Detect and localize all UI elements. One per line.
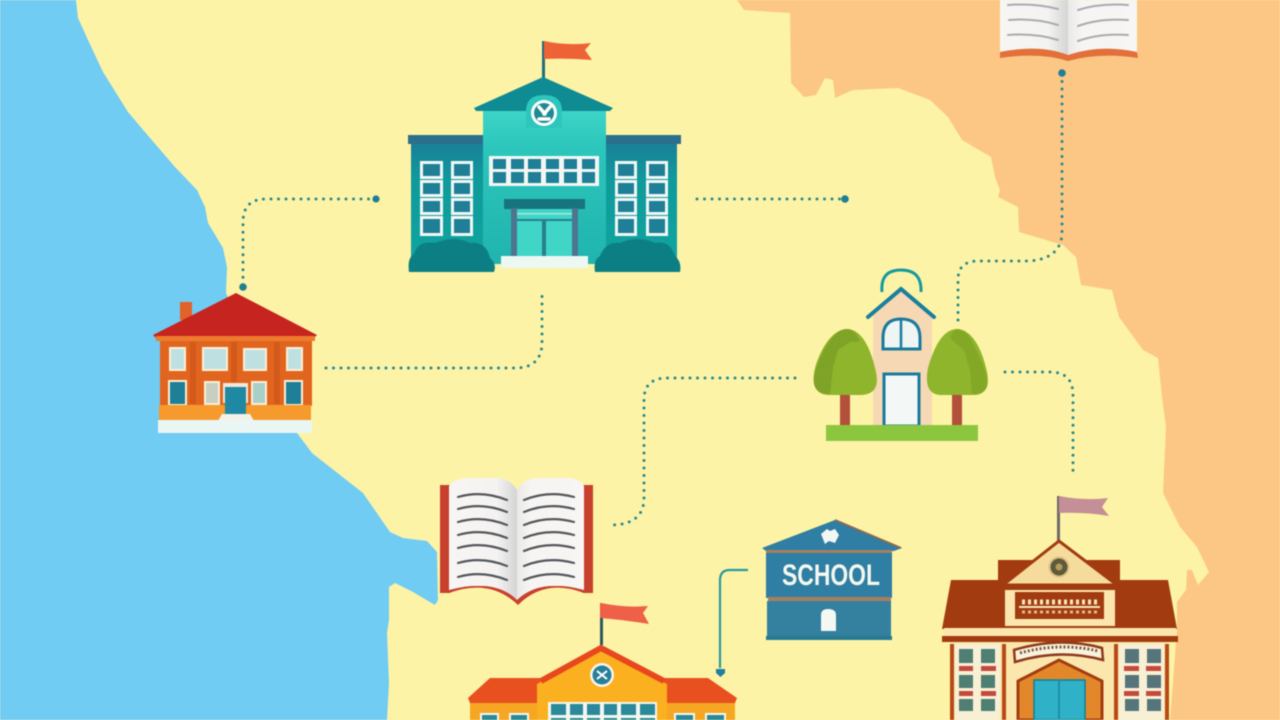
facade [950, 642, 1168, 720]
right wing windows [616, 162, 666, 234]
lower storey [767, 601, 891, 638]
upper storey [766, 552, 892, 598]
bell arc [882, 270, 921, 292]
central window band [489, 156, 599, 186]
arched window [883, 319, 920, 349]
side windows [481, 714, 725, 720]
gable [1003, 541, 1117, 585]
dotted connector: chapel to open book [610, 378, 795, 525]
chapel body [873, 291, 932, 426]
dotted connector: teal school to the east [697, 195, 849, 203]
brown bands [766, 550, 892, 601]
side walls [470, 703, 735, 720]
icon: teal main school building [408, 41, 681, 272]
left page [449, 478, 517, 600]
steps [501, 256, 588, 268]
door [884, 374, 919, 426]
school sign text: SCHOOL [782, 559, 880, 592]
arched banner [1014, 642, 1103, 662]
plinth [159, 405, 311, 421]
dotted connector: chapel to top book [958, 69, 1066, 320]
map region: sea on the west [0, 0, 438, 720]
right window [1114, 644, 1169, 720]
lower windows [169, 381, 302, 405]
icon: blue school sign building [762, 520, 902, 640]
medallion [1050, 558, 1068, 576]
flag [600, 603, 649, 645]
chimney [180, 302, 192, 320]
left tree [814, 329, 877, 425]
roof [762, 520, 902, 551]
base [158, 420, 312, 433]
dotted connector: teal school to orange school [239, 195, 380, 291]
side roofs [468, 678, 737, 703]
icon: small chapel with trees [814, 270, 988, 441]
left window [950, 644, 1006, 720]
central block [483, 108, 606, 264]
sign panel [1005, 590, 1115, 626]
red cover [440, 485, 593, 605]
arched entrance [1018, 660, 1102, 720]
entrance [504, 199, 585, 257]
icon: yellow school with flag [468, 603, 737, 720]
upper windows [170, 348, 302, 370]
walls [160, 336, 312, 406]
icon: open book at top [1000, 0, 1138, 61]
central windows [548, 702, 657, 720]
dotted connector: chapel to brown school [1005, 372, 1073, 472]
roof gable [474, 77, 613, 111]
right tree [927, 329, 988, 425]
side roof [942, 580, 1177, 629]
ground [826, 425, 978, 441]
base [766, 636, 892, 640]
roof [153, 293, 317, 338]
wall pilasters [190, 342, 280, 404]
left wing windows [422, 162, 472, 234]
clock [590, 663, 614, 687]
icon: brown heritage school [942, 496, 1178, 720]
bushes [409, 239, 680, 272]
door [218, 383, 254, 421]
flag [542, 41, 592, 78]
central block [537, 650, 667, 720]
cream band and eave [942, 628, 1178, 642]
clock [526, 95, 562, 128]
left wing [408, 135, 483, 266]
arrow: blue school to yellow school [716, 570, 748, 677]
right wing [604, 135, 681, 266]
door [821, 609, 836, 631]
text lines [458, 494, 574, 580]
icon: large open book [440, 478, 593, 605]
map region: neighbouring land on the east [737, 0, 1280, 720]
upper roof [998, 560, 1120, 586]
gable roof stroke [541, 648, 664, 681]
right page [517, 478, 584, 600]
dotted connector: orange school to teal school [326, 295, 542, 368]
flag [1057, 496, 1109, 542]
icon: orange brick school [153, 293, 317, 433]
roof [868, 289, 934, 317]
roof emblem [821, 529, 839, 544]
